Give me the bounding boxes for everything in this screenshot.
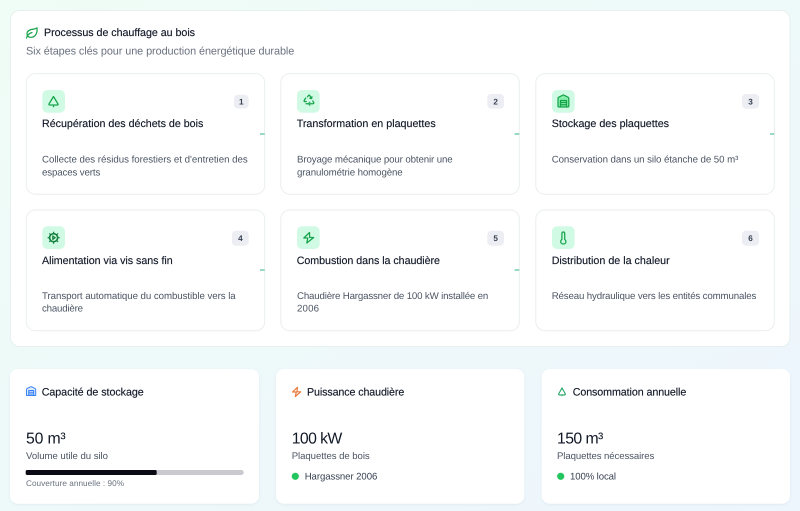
label: Volume utile du silo: [26, 451, 108, 462]
arrow connector: [260, 269, 265, 271]
step number 2: 2: [493, 97, 498, 106]
step description: espaces verts: [42, 168, 100, 179]
step number 6: [742, 231, 759, 246]
step description: [297, 291, 488, 315]
step number 5: 5: [493, 234, 498, 243]
step card 3: [536, 74, 774, 194]
step number 4: [232, 231, 249, 246]
icon: gear: [42, 226, 65, 249]
panel: heating process: [10, 10, 790, 346]
card heading: Capacité de stockage: [42, 387, 144, 399]
step description: Collecte des résidus forestiers et d'entretien des: [42, 154, 248, 165]
step description: [42, 291, 236, 315]
progress bar: [26, 470, 244, 475]
title: Processus de chauffage au bois: [44, 27, 195, 39]
step number 2: [487, 94, 504, 109]
step description: Broyage mécanique pour obtenir une: [297, 154, 453, 165]
status dot and note: Hargassner 2006: [305, 472, 377, 483]
step description: chaudière: [42, 304, 83, 315]
step description: [297, 154, 453, 179]
step description: Transport automatique du combustible vers la: [42, 291, 236, 302]
label: Plaquettes de bois: [292, 451, 370, 462]
label: Plaquettes nécessaires: [557, 451, 655, 462]
step description: Conservation dans un silo étanche de 50 m³: [552, 154, 739, 165]
step description: Réseau hydraulique vers les entités communales: [552, 291, 756, 302]
panel: boiler power: [276, 369, 524, 504]
icon: leaf: [26, 28, 37, 38]
step card 4: [26, 210, 265, 331]
step title: Alimentation via vis sans fin: [42, 255, 173, 267]
step title: Récupération des déchets de bois: [42, 118, 203, 130]
step title: Stockage des plaquettes: [552, 118, 669, 130]
arrow connector: [770, 133, 774, 135]
step number 3: 3: [748, 97, 753, 106]
step title: Distribution de la chaleur: [552, 255, 670, 267]
step description: Chaudière Hargassner de 100 kW installée en: [297, 291, 488, 302]
step number 4: 4: [238, 234, 243, 243]
icon: lightning: [292, 387, 301, 396]
value: 150 m³: [557, 430, 603, 447]
value: 100 kW: [292, 430, 342, 447]
step description: granulométrie homogène: [297, 168, 403, 179]
icon: recycle: [297, 90, 320, 113]
arrow connector: [514, 269, 519, 271]
step description: 2006: [297, 304, 319, 315]
step number 1: [234, 95, 249, 108]
arrow connector: [260, 133, 265, 135]
step card 5: [281, 210, 519, 331]
step number 6: 6: [748, 234, 753, 243]
icon: lightning: [297, 226, 320, 249]
card heading: Consommation annuelle: [573, 387, 686, 399]
icon: warehouse: [552, 90, 575, 113]
card heading: Puissance chaudière: [307, 387, 404, 399]
value: 50 m³: [26, 430, 66, 447]
icon: thermometer: [552, 226, 575, 249]
subtitle: Six étapes clés pour une production énergétique durable: [26, 45, 294, 57]
icon: tree: [42, 90, 65, 113]
icon: tree: [559, 388, 565, 396]
step number 3: [742, 94, 759, 109]
step number 1: 1: [239, 98, 244, 106]
step description: [42, 154, 248, 179]
step number 5: [487, 231, 504, 246]
step card 1: [26, 74, 265, 194]
step card 6: [536, 210, 774, 331]
status dot and note: 100% local: [570, 472, 616, 483]
step title: Combustion dans la chaudière: [297, 255, 440, 267]
step title: Transformation en plaquettes: [297, 118, 436, 130]
panel: storage capacity: [10, 369, 259, 504]
panel: annual consumption: [542, 369, 790, 504]
progress note: Couverture annuelle : 90%: [26, 479, 124, 488]
arrow connector: [514, 133, 519, 135]
step card 2: [281, 74, 519, 194]
icon: warehouse: [26, 387, 36, 396]
